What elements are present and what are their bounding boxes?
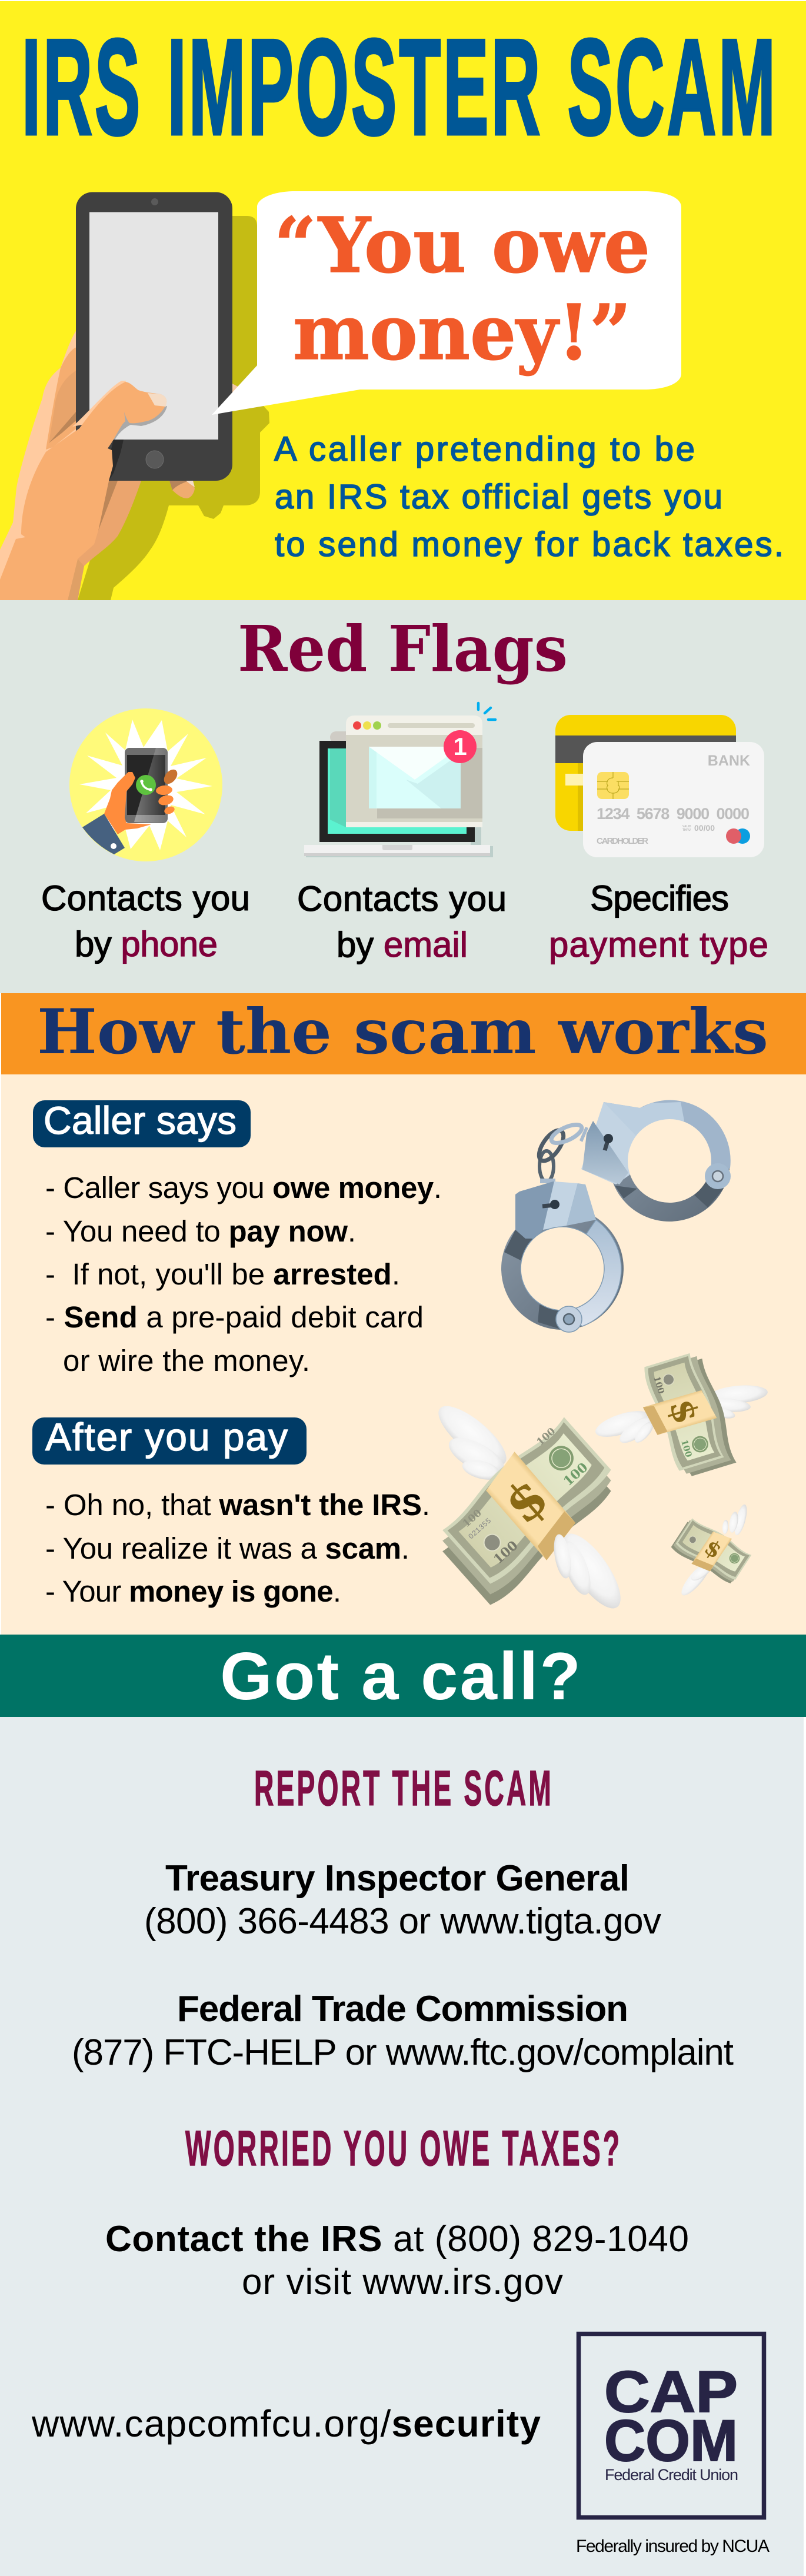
speech bubble [212, 191, 681, 415]
contact: irs: Contact the IRS at (800) 829-1040 [105, 2219, 689, 2259]
contact: federal trade commission [72, 1989, 734, 2073]
contact: treasury inspector general: (800) 366-4483 or www.tigta.gov [144, 1901, 661, 1942]
title: IRS IMPOSTER SCAM [22, 11, 775, 163]
contact: irs: or visit www.irs.gov [242, 2262, 563, 2302]
banner heading: Got a call? [220, 1639, 581, 1714]
contact: federal trade commission: (877) FTC-HELP or www.ftc.gov/complaint [72, 2032, 734, 2073]
icon: phone call [69, 708, 222, 861]
logo: cap com: Federal Credit Union [605, 2466, 738, 2484]
icon: flying money small [670, 1503, 753, 1599]
icon: email on laptop: 1 [453, 733, 467, 760]
description [274, 430, 784, 564]
icon: credit cards: CARDHOLDER [597, 836, 648, 846]
bubble quote: money!” [293, 288, 631, 377]
list: after you pay [45, 1488, 430, 1608]
icon: flying money medium: 100 [651, 1375, 666, 1395]
icon: credit cards: 00/00 [694, 823, 715, 833]
contact: treasury inspector general: Treasury Inspector General [165, 1858, 630, 1899]
panel: report the scam [0, 1717, 804, 2576]
panel: red flags [0, 600, 806, 993]
website: www.capcomfcu.org/security [31, 2402, 541, 2445]
icon: flying money small: $ [700, 1534, 727, 1564]
icon: credit cards: 1234 5678 9000 0000 [597, 805, 750, 823]
list: caller says: - You need to pay now. [45, 1214, 356, 1248]
logo: cap com [579, 2334, 764, 2517]
logo: cap com: COM [604, 2408, 738, 2473]
icon: flying money large: 021355 [467, 1516, 493, 1541]
icon: flying money large: 100 [491, 1538, 521, 1567]
heading: How the scam works [37, 995, 768, 1068]
icon: handcuffs [501, 1100, 731, 1332]
caption: payment [549, 878, 768, 964]
icon: flying money large: $ [492, 1466, 559, 1536]
icon: flying money medium: $ [661, 1394, 707, 1429]
description: an IRS tax official gets you [275, 478, 722, 516]
icon: flying money large: 100 [561, 1460, 591, 1489]
bubble quote [274, 201, 650, 377]
panel: header [0, 1, 806, 600]
list: after you pay: - Your money is gone. [45, 1575, 341, 1608]
caption: phone: by phone [75, 924, 218, 964]
panel: how the scam works [1, 993, 806, 1635]
icon: flying money medium: 100 [679, 1439, 694, 1459]
list: caller says: - Send a pre-paid debit card [45, 1300, 424, 1334]
icon: credit cards: THRU [682, 828, 691, 832]
list: after you pay: - You realize it was a scam. [45, 1532, 409, 1565]
caption: payment: payment type [549, 925, 768, 964]
icon: flying money large: 100 [535, 1426, 558, 1448]
bubble quote: “You owe [274, 201, 650, 290]
description: to send money for back taxes. [275, 525, 784, 564]
caption: email: Contacts you [297, 879, 507, 918]
icon: credit cards: VALID [682, 825, 691, 828]
icon: hand holding phone [0, 192, 269, 600]
caption: email: by email [337, 925, 468, 964]
contact: irs [105, 2219, 689, 2302]
icon: flying money large [430, 1397, 631, 1616]
icon: flying money medium [592, 1351, 768, 1478]
list: caller says: or wire the money. [63, 1344, 310, 1377]
contact: treasury inspector general [144, 1858, 661, 1942]
list: after you pay: - Oh no, that wasn't the IRS. [45, 1488, 430, 1522]
list: caller says: - If not, you'll be arrested. [45, 1257, 400, 1291]
list: caller says: - Caller says you owe money. [45, 1171, 442, 1204]
heading: Red Flags [238, 613, 568, 686]
heading: worried you owe taxes: WORRIED YOU OWE TAXES? [185, 2122, 620, 2176]
icon: credit cards: BANK [708, 753, 750, 769]
description: A caller pretending to be [274, 430, 695, 468]
caption: phone: Contacts you [41, 878, 250, 918]
list: caller says [45, 1171, 442, 1377]
heading: report the scam: REPORT THE SCAM [254, 1762, 551, 1816]
ncua note: Federally insured by NCUA [576, 2537, 770, 2556]
caption: email [297, 879, 507, 964]
pill: caller says: Caller says [44, 1099, 237, 1142]
icon: flying money large: 100 [461, 1507, 484, 1530]
icon: credit cards [555, 715, 764, 857]
pill: after you pay: After you pay [45, 1415, 288, 1459]
icon: email on laptop [304, 703, 495, 857]
contact: federal trade commission: Federal Trade Commission [177, 1989, 628, 2029]
logo: cap com: CAP [604, 2359, 738, 2424]
caption: payment: Specifies [590, 878, 729, 918]
panel: got a call banner [0, 1635, 806, 1717]
caption: phone [41, 878, 250, 964]
